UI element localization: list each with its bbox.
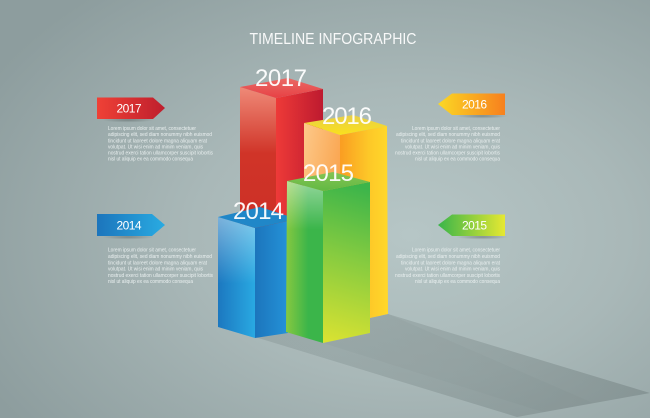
text: 2015: volutpat. Ut wisi enim ad minim veniam, quis [405, 266, 500, 272]
text: 2015: adipiscing elit, sed diam nonummy nibh euismod [396, 254, 500, 260]
text: 2016: Lorem ipsum dolor sit amet, consectetuer [412, 126, 500, 132]
text: 2017: tincidunt ut laoreet dolore magna aliquam erat [108, 138, 208, 144]
tag: 2016: 2016 [462, 98, 487, 112]
bar: 2015 green: 2015 [303, 160, 354, 187]
text: 2015 [395, 248, 501, 285]
tag: 2015 [438, 214, 508, 240]
text: 2016: volutpat. Ut wisi enim ad minim veniam, quis [405, 144, 500, 150]
text: 2014: tincidunt ut laoreet dolore magna aliquam erat [108, 260, 208, 266]
bar: 2017 red: 2017 [255, 65, 307, 92]
bar: 2017 red [240, 65, 323, 235]
bar: 2016 yellow [304, 103, 388, 318]
text: 2015: nisl ut aliquip ex ea commodo consequa [415, 279, 500, 285]
tag: 2014: 2014 [116, 218, 142, 232]
text: 2014: adipiscing elit, sed diam nonummy nibh euismod [108, 254, 212, 260]
text: 2017 [108, 126, 213, 162]
text: 2015: nostrud exerci tation ullamcorper suscipit lobortis [395, 273, 500, 279]
text: 2014 [108, 248, 213, 285]
text: 2017: nisl ut aliquip ex ea commodo consequa [108, 156, 193, 162]
text: 2017: nostrud exerci tation ullamcorper suscipit lobortis [108, 150, 213, 156]
bar: 2015 green [286, 160, 370, 343]
bar: 2014 blue: 2014 [233, 198, 284, 225]
text: 2016 [395, 126, 501, 162]
bar: 2014 blue [218, 198, 288, 338]
text: 2014: volutpat. Ut wisi enim ad minim veniam, quis [108, 266, 203, 272]
text: 2015: Lorem ipsum dolor sit amet, consectetuer [412, 248, 500, 254]
text: 2017: volutpat. Ut wisi enim ad minim veniam, quis [108, 144, 203, 150]
tag: 2017 [97, 98, 165, 122]
text: 2014: nisl ut aliquip ex ea commodo consequa [108, 279, 193, 285]
tag: 2016 [438, 94, 508, 118]
tag: 2014 [97, 214, 165, 240]
bar: 2016 yellow: 2016 [322, 103, 372, 130]
tag: 2017: 2017 [116, 102, 142, 116]
text: 2016: tincidunt ut laoreet dolore magna aliquam erat [401, 138, 501, 144]
text: 2016: nostrud exerci tation ullamcorper suscipit lobortis [395, 150, 500, 156]
text: 2015: tincidunt ut laoreet dolore magna aliquam erat [401, 260, 501, 266]
bar cast shadows [255, 314, 650, 417]
text: 2017: Lorem ipsum dolor sit amet, consectetuer [108, 126, 196, 132]
title: TIMELINE INFOGRAPHIC [250, 31, 416, 48]
text: 2017: adipiscing elit, sed diam nonummy nibh euismod [108, 132, 212, 138]
text: 2014: Lorem ipsum dolor sit amet, consectetuer [108, 248, 196, 254]
tag: 2015: 2015 [462, 218, 487, 232]
text: 2016: adipiscing elit, sed diam nonummy nibh euismod [396, 132, 500, 138]
text: 2014: nostrud exerci tation ullamcorper suscipit lobortis [108, 273, 213, 279]
text: 2016: nisl ut aliquip ex ea commodo consequa [415, 156, 500, 162]
